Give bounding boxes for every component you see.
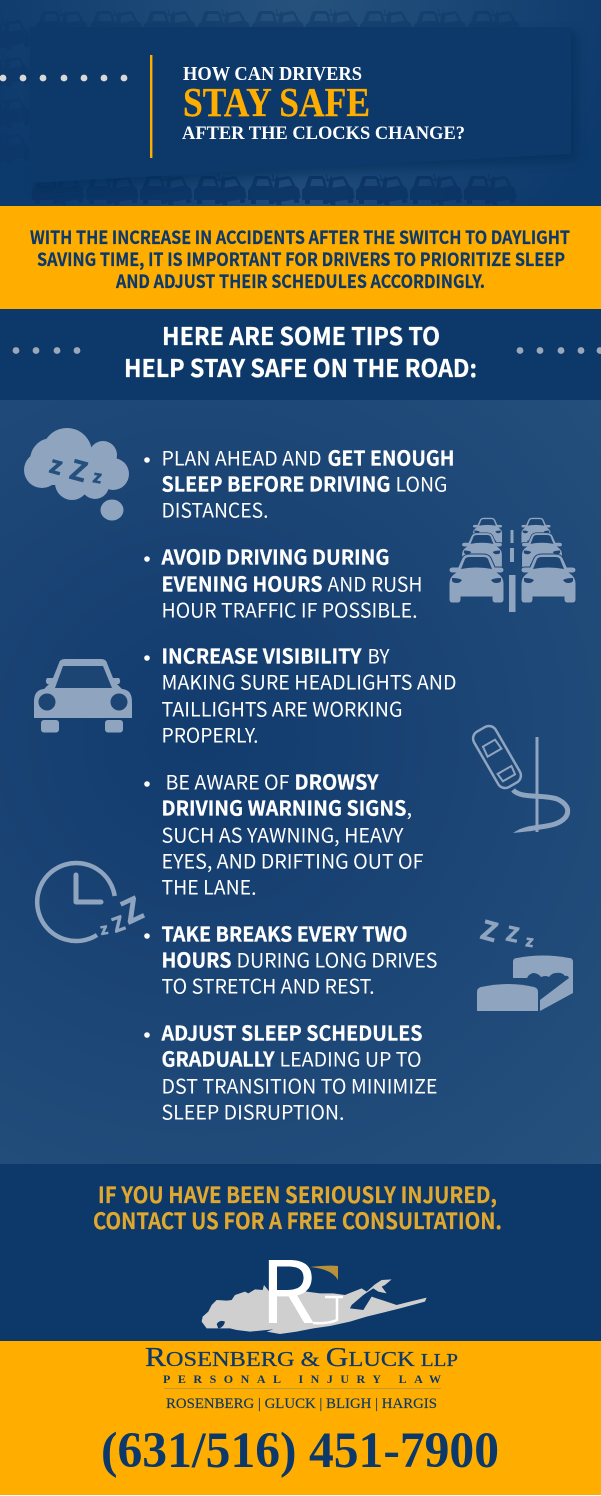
icon: bed with zzz: Z — [504, 918, 522, 948]
tip 2: EVENING HOURS — [162, 568, 322, 598]
tip 3: INCREASE VISIBILITY — [162, 640, 362, 670]
icon: sleep thought cloud — [24, 428, 129, 520]
tip 6: SLEEP DISRUPTION. — [162, 1096, 344, 1126]
tip 4: , — [406, 792, 412, 822]
title panel shadow — [34, 32, 577, 190]
firm tagline: PERSONAL INJURY LAW — [163, 1372, 441, 1386]
tip 1: GET ENOUGH — [328, 442, 454, 472]
tip 1: SLEEP BEFORE DRIVING — [162, 468, 390, 498]
tip 1 — [144, 442, 454, 524]
title divider — [150, 55, 152, 158]
icon: clock with zzz: Z — [107, 907, 129, 939]
tip 3: TAILLIGHTS ARE WORKING — [162, 694, 402, 722]
icon: clock with zzz: Z — [113, 884, 150, 934]
icon: sleep thought cloud: Z — [66, 448, 92, 490]
tip 4: DROWSY — [294, 766, 379, 796]
tip 5: TO STRETCH AND REST. — [162, 970, 374, 1000]
tip 5: TAKE BREAKS EVERY TWO — [162, 918, 408, 948]
icon: car front — [34, 659, 132, 732]
tip 6: LEADING UP TO — [280, 1044, 422, 1072]
icon: swerving car — [470, 723, 568, 833]
logo: long island with RG monogram: R — [260, 1223, 316, 1348]
tip 5: DURING LONG DRIVES — [236, 944, 438, 974]
tip 4: DRIVING WARNING SIGNS — [162, 792, 406, 822]
header background — [0, 0, 601, 206]
call to action — [93, 1178, 502, 1236]
firm name: ROSENBERG & GLUCK LLP — [145, 1342, 458, 1372]
tips heading: HERE ARE SOME TIPS TO — [162, 317, 440, 352]
tip 4: SUCH AS YAWNING, HEAVY — [162, 820, 404, 848]
tip 4: THE LANE. — [162, 872, 256, 900]
intro band — [0, 206, 601, 309]
tip 5: HOURS — [162, 944, 232, 974]
crashed car background pattern — [56, 9, 516, 205]
title: HOW CAN DRIVERS — [183, 63, 362, 85]
title: AFTER THE CLOCKS CHANGE? — [182, 123, 465, 144]
header dots — [0, 75, 127, 81]
icon: bed with zzz: Z — [477, 910, 502, 950]
tip 2: AVOID DRIVING DURING — [161, 542, 390, 570]
tips heading — [124, 317, 477, 384]
icon: sleep thought cloud: z — [91, 462, 104, 488]
tip 5 — [144, 918, 438, 1000]
footer navy band — [0, 1164, 601, 1341]
tip 1: DISTANCES. — [162, 494, 268, 524]
tip 1: LONG — [396, 468, 448, 498]
tip 1: PLAN AHEAD AND — [162, 442, 322, 472]
tip 6: ADJUST SLEEP SCHEDULES — [161, 1018, 422, 1046]
heading dots — [13, 347, 601, 354]
icon: traffic — [449, 518, 576, 612]
tip 3: MAKING SURE HEADLIGHTS AND — [162, 666, 456, 696]
title: STAY SAFE — [183, 79, 370, 125]
call to action: CONTACT US FOR A FREE CONSULTATION. — [93, 1204, 502, 1236]
tip 2: AND RUSH — [328, 568, 422, 598]
tip 4: EYES, AND DRIFTING OUT OF — [162, 846, 424, 874]
icon: clock with zzz — [37, 863, 150, 941]
tip 6: GRADUALLY — [162, 1044, 275, 1072]
logo: long island with RG monogram — [202, 1223, 427, 1348]
tip 4: BE AWARE OF — [166, 766, 290, 796]
intro text — [30, 224, 570, 294]
icon: bed with zzz: z — [524, 930, 535, 952]
footer yellow band — [0, 1341, 601, 1495]
phone number: (631/516) 451-7900 — [101, 1423, 499, 1479]
tip 6 — [144, 1018, 437, 1126]
tip 3: PROPERLY. — [162, 720, 258, 748]
icon: clock with zzz: z — [98, 918, 110, 940]
title — [182, 63, 465, 144]
partners: ROSENBERG | GLUCK | BLIGH | HARGIS — [166, 1396, 437, 1412]
tip 2: HOUR TRAFFIC IF POSSIBLE. — [162, 594, 418, 624]
tip 3: BY — [368, 640, 390, 670]
tips heading: HELP STAY SAFE ON THE ROAD: — [124, 349, 477, 384]
intro text: AND ADJUST THEIR SCHEDULES ACCORDINGLY. — [115, 268, 485, 294]
tip 3 — [144, 640, 456, 748]
tips heading band — [0, 309, 601, 400]
title panel — [30, 27, 571, 183]
tip 6: DST TRANSITION TO MINIMIZE — [162, 1070, 438, 1100]
icon: sleep thought cloud: z — [46, 445, 67, 482]
tip 2 — [144, 542, 422, 624]
tips panel — [0, 400, 601, 1164]
tip 4 — [144, 766, 423, 900]
call to action: IF YOU HAVE BEEN SERIOUSLY INJURED, — [98, 1178, 497, 1210]
icon: bed with zzz — [477, 910, 573, 1011]
